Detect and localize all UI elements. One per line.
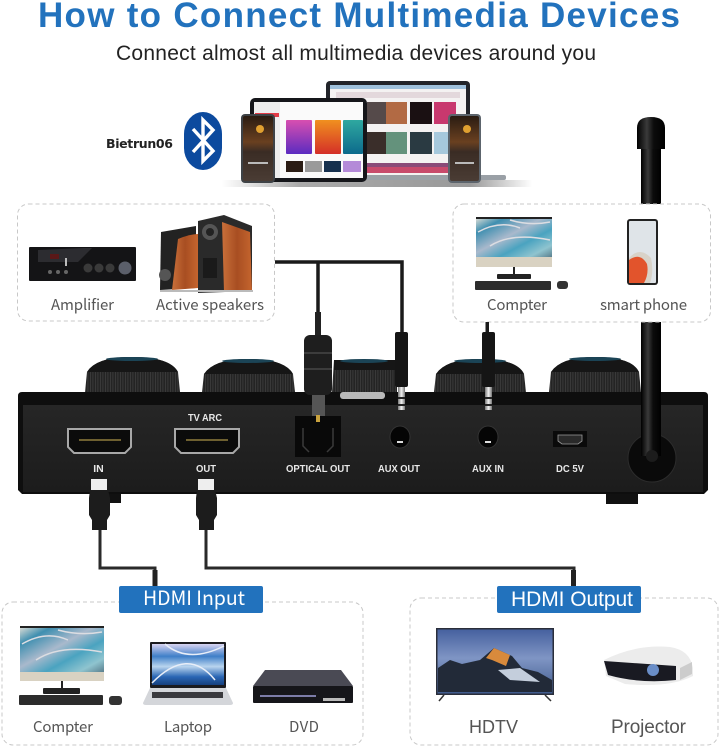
laptop bbox=[318, 81, 506, 180]
amplifier bbox=[29, 247, 136, 281]
label: DVD: DVD bbox=[289, 716, 319, 737]
HDMI input cable bbox=[89, 479, 158, 587]
body bbox=[18, 392, 708, 494]
antenna base bbox=[628, 392, 676, 482]
badge: HDMI output: HDMI Output bbox=[511, 588, 633, 611]
port: HDMI in bbox=[68, 429, 131, 453]
phone left bbox=[241, 114, 275, 183]
label: amplifier: Amplifier bbox=[51, 294, 114, 315]
subtitle: Connect almost all multimedia devices around you bbox=[116, 42, 596, 65]
port: HDMI out bbox=[175, 429, 239, 453]
phone right bbox=[448, 114, 481, 183]
port labels: OUT bbox=[196, 463, 217, 475]
badge: HDMI input: HDMI Input bbox=[143, 582, 246, 611]
feet bbox=[99, 494, 121, 503]
badge: HDMI input bbox=[119, 582, 263, 613]
computer bbox=[475, 217, 568, 290]
device shadow bbox=[222, 180, 532, 187]
label: smart phone: smart phone bbox=[600, 294, 687, 315]
smartphone bbox=[627, 219, 658, 285]
computer bbox=[19, 626, 122, 705]
projector bbox=[604, 647, 693, 685]
port labels: TV ARC bbox=[188, 412, 222, 424]
aux out plug bbox=[395, 332, 408, 410]
speakers bbox=[159, 215, 253, 293]
HDMI output cable bbox=[196, 479, 576, 587]
panel: HDMI input bbox=[2, 602, 363, 745]
music devices group bbox=[222, 81, 532, 187]
port labels: AUX IN bbox=[472, 463, 504, 475]
silver button bbox=[340, 392, 385, 399]
rear panel bbox=[23, 405, 703, 492]
port: aux in bbox=[478, 426, 498, 448]
label: projector: Projector bbox=[611, 717, 687, 738]
label: active speakers: Active speakers bbox=[156, 294, 264, 315]
soundbar receiver bbox=[18, 357, 708, 504]
icon: bluetooth bbox=[184, 112, 222, 170]
label: HDTV: HDTV bbox=[469, 717, 518, 737]
label: computer: Compter bbox=[33, 716, 93, 737]
port: optical bbox=[295, 416, 341, 457]
port labels: DC 5V bbox=[556, 463, 584, 475]
bluetooth name label: Bietrun06 bbox=[106, 136, 173, 151]
laptop bbox=[143, 642, 233, 705]
television bbox=[436, 628, 554, 701]
port labels: IN bbox=[93, 463, 104, 475]
port labels: AUX OUT bbox=[378, 463, 421, 475]
optical plug bbox=[304, 312, 332, 422]
port labels: OPTICAL OUT bbox=[286, 463, 351, 475]
panel: HDMI output bbox=[410, 598, 718, 745]
right foot bbox=[606, 494, 638, 504]
port: aux out bbox=[390, 426, 410, 448]
port: DC bbox=[553, 431, 587, 447]
DVD player bbox=[253, 670, 353, 703]
tablet bbox=[250, 98, 367, 182]
aux in cable bbox=[486, 322, 489, 336]
panel: amplifier and speakers bbox=[18, 204, 274, 321]
knobs bbox=[85, 357, 641, 392]
label: computer: Compter bbox=[487, 294, 547, 315]
panel: computer and phone bbox=[453, 204, 710, 322]
antenna bbox=[637, 117, 665, 455]
port labels bbox=[93, 412, 584, 475]
cables to audio panel bbox=[275, 262, 402, 335]
aux in plug bbox=[482, 332, 495, 410]
label: laptop: Laptop bbox=[164, 716, 212, 737]
